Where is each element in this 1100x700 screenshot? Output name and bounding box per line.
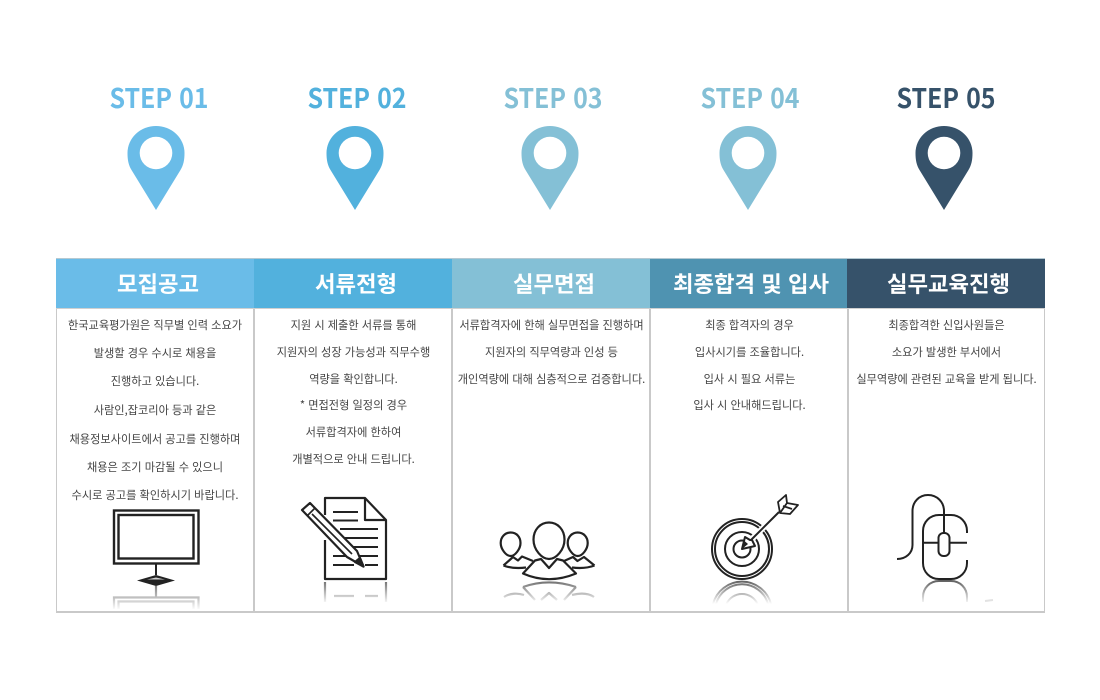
text block: 실무면접 설명 — [458, 317, 645, 387]
icon: monitor — [112, 509, 200, 608]
decorative header top edge — [56, 258, 1045, 259]
heading: 실무교육진행 — [847, 259, 1045, 308]
decorative header underline — [56, 308, 1045, 309]
step 01 label: STEP 01 — [109, 77, 209, 116]
step 02 label: STEP 02 — [307, 77, 407, 116]
text block: 서류전형 설명: 지원자의 성장 가능성과 직무수행 — [277, 344, 430, 360]
text block: 모집공고 설명: 채용은 조기 마감될 수 있으니 — [87, 459, 223, 475]
heading: 실무면접: 실무면접 — [513, 267, 595, 299]
heading: 서류전형 — [254, 259, 453, 308]
text block: 서류전형 설명: 개별적으로 안내 드립니다. — [292, 451, 415, 467]
panel: 서류전형 — [255, 259, 453, 613]
text block: 서류전형 설명: * 면접전형 일정의 경우 — [300, 397, 407, 413]
icon: map pin 05 — [916, 126, 972, 210]
panel: 실무교육진행 — [849, 259, 1045, 613]
text block: 실무교육 설명: 실무역량에 관련된 교육을 받게 됩니다. — [856, 371, 1037, 387]
icon: map pin 02 — [326, 126, 384, 210]
icon: target with arrow — [711, 494, 799, 603]
step 04 label: STEP 04 — [700, 77, 800, 116]
text block: 최종합격 설명: 입사 시 필요 서류는 — [704, 371, 795, 387]
text block: 최종합격 설명 — [693, 317, 806, 413]
text block: 서류전형 설명: 서류합격자에 한하여 — [306, 424, 401, 440]
text block: 최종합격 설명: 입사 시 안내해드립니다. — [693, 397, 806, 413]
text block: 모집공고 설명: 채용정보사이트에서 공고를 진행하며 — [70, 431, 240, 447]
step 05 label: STEP 05 — [896, 77, 996, 116]
heading: 모집공고: 모집공고 — [117, 267, 199, 299]
text block: 실무면접 설명: 서류합격자에 한해 실무면접을 진행하며 — [459, 317, 644, 333]
icon: map pin 04 — [720, 126, 776, 210]
text block: 실무교육 설명: 최종합격한 신입사원들은 — [888, 317, 1005, 333]
icon: document and pencil — [300, 496, 388, 602]
icon: map pin 01 — [128, 126, 184, 210]
panel: 최종합격 및 입사 — [651, 259, 849, 613]
text block: 서류전형 설명: 역량을 확인합니다. — [309, 371, 398, 387]
panel: 모집공고 — [56, 259, 255, 613]
heading: 모집공고 — [56, 259, 255, 308]
heading: 실무교육진행: 실무교육진행 — [887, 267, 1010, 299]
text block: 모집공고 설명: 수시로 공고를 확인하시기 바랍니다. — [72, 487, 238, 503]
step 03 label: STEP 03 — [503, 77, 603, 116]
text block: 서류전형 설명 — [277, 317, 430, 467]
text block: 실무교육 설명 — [856, 317, 1037, 387]
text block: 모집공고 설명 — [68, 317, 242, 503]
text block: 최종합격 설명: 입사시기를 조율합니다. — [695, 344, 804, 360]
icon: map pin 03 — [522, 126, 578, 210]
heading: 서류전형: 서류전형 — [315, 267, 397, 299]
icon: group of people — [500, 521, 596, 601]
text block: 최종합격 설명: 최종 합격자의 경우 — [705, 317, 794, 333]
text block: 모집공고 설명: 한국교육평가원은 직무별 인력 소요가 — [68, 317, 242, 333]
icon: computer mouse — [897, 494, 993, 602]
text block: 실무면접 설명: 지원자의 직무역량과 인성 등 — [485, 344, 618, 360]
text block: 모집공고 설명: 진행하고 있습니다. — [111, 373, 199, 389]
text block: 모집공고 설명: 사람인,잡코리아 등과 같은 — [94, 402, 216, 418]
heading: 최종합격 및 입사: 최종합격 및 입사 — [673, 267, 829, 299]
text block: 실무면접 설명: 개인역량에 대해 심층적으로 검증합니다. — [458, 371, 645, 387]
text block: 서류전형 설명: 지원 시 제출한 서류를 통해 — [291, 317, 416, 333]
text block: 모집공고 설명: 발생할 경우 수시로 채용을 — [94, 345, 216, 361]
panel: 실무면접 — [453, 259, 651, 613]
heading: 실무면접 — [452, 259, 651, 308]
text block: 실무교육 설명: 소요가 발생한 부서에서 — [892, 344, 1001, 360]
heading: 최종합격 및 입사 — [650, 259, 849, 308]
